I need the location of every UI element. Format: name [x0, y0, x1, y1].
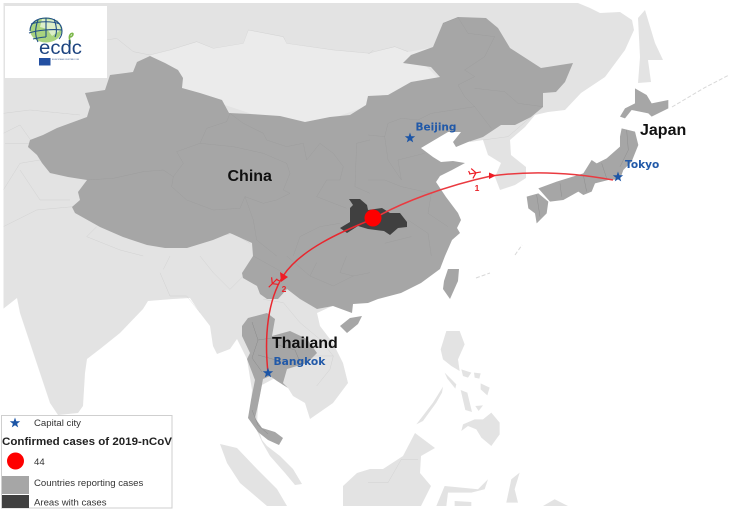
logo sprout [69, 33, 73, 44]
Taiwan [443, 269, 459, 299]
label: Thailand: Thailand [272, 335, 338, 352]
neighbouring country borders [3, 30, 531, 483]
logo small print: EUROPEAN CENTRE FOR [52, 58, 80, 61]
legend title: Confirmed cases of 2019-nCoV [2, 436, 173, 448]
case marker: 44 cases in Wuhan [364, 210, 382, 226]
neighbouring islands: Sakhalin, Sumatra, Borneo, Philippines, Indonesia [220, 10, 663, 506]
city label: Bangkok: Bangkok [274, 355, 326, 368]
China provincial borders [87, 17, 543, 286]
logo EU flag [39, 58, 50, 66]
plane icon route 1 [468, 167, 482, 179]
legend text: countries: Countries reporting cases [34, 478, 144, 489]
flight route 1: Wuhan to Tokyo [373, 167, 613, 219]
Mongolia [150, 30, 440, 130]
legend swatch: countries [2, 476, 29, 494]
label: China: China [228, 168, 272, 185]
capital star: Beijing [405, 132, 415, 142]
arrowhead route 1 [489, 172, 496, 179]
legend swatch: areas [2, 495, 29, 508]
city label: Beijing: Beijing [416, 122, 456, 134]
China [28, 17, 573, 313]
capital star: Tokyo [613, 172, 623, 181]
arrowhead route 2 [280, 272, 288, 282]
Hubei province: area with cases [340, 199, 407, 235]
logo: ECDC [5, 6, 107, 78]
Thailand [242, 313, 317, 445]
Japan [527, 88, 668, 223]
city label: Tokyo: Tokyo [625, 159, 659, 171]
logo globe [29, 18, 62, 42]
legend text: 44: 44 [34, 457, 45, 468]
capital star: Bangkok [263, 368, 273, 377]
plane icon route 2 [265, 275, 281, 291]
label: Japan: Japan [640, 122, 686, 139]
legend text: capital city: Capital city [34, 418, 81, 429]
route number 1: 1 [475, 183, 480, 193]
legend red circle [7, 452, 24, 470]
legend star: capital city [10, 418, 20, 427]
route number 2: 2 [282, 284, 287, 294]
legend text: areas: Areas with cases [34, 498, 107, 508]
Hainan island [340, 316, 362, 333]
flight route 2: Wuhan to Bangkok [265, 219, 373, 373]
Thailand provincial borders [252, 322, 300, 434]
Japan prefecture borders [537, 130, 628, 217]
Kuril and Ryukyu island chains [476, 75, 729, 278]
legend [2, 416, 173, 508]
logo wordmark: ecdc [39, 37, 82, 59]
